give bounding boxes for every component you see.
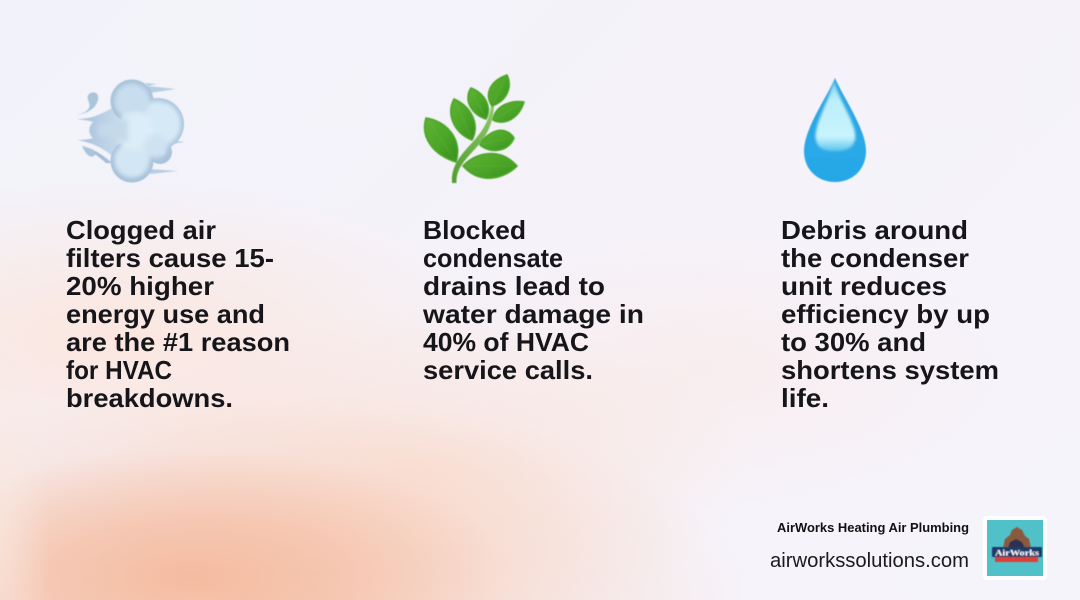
text block: clogged air filters: are the #1 reason (66, 327, 290, 357)
text block: debris around condenser (781, 215, 999, 413)
text block: debris around condenser: efficiency by up (781, 299, 990, 329)
icon: puff of air (77, 80, 184, 182)
website: airworkssolutions.com (770, 550, 969, 572)
text block: blocked condensate drains: service calls. (423, 355, 593, 385)
company name: AirWorks Heating Air Plumbing (777, 520, 969, 535)
text block: blocked condensate drains (422, 215, 644, 385)
text block: blocked condensate drains: water damage in (422, 299, 644, 329)
text block: clogged air filters: energy use and (66, 299, 265, 329)
text block: debris around condenser: Debris around (781, 215, 968, 245)
text block: clogged air filters: for HVAC (66, 355, 172, 385)
icon: water drop (804, 78, 866, 182)
text block: clogged air filters: breakdowns. (66, 383, 233, 413)
logo: AirWorks (995, 548, 1039, 558)
text block: blocked condensate drains: drains lead to (423, 271, 605, 301)
text block: debris around condenser: the condenser (781, 243, 969, 273)
text block: clogged air filters: filters cause 15- (66, 243, 274, 273)
icon: green herb sprig (425, 75, 524, 183)
text block: blocked condensate drains: Blocked (423, 215, 526, 245)
text block: clogged air filters: 20% higher (66, 271, 214, 301)
text block: blocked condensate drains: 40% of HVAC (423, 327, 589, 357)
text block: clogged air filters: Clogged air (66, 215, 216, 245)
text block: debris around condenser: life. (781, 383, 829, 413)
text block: clogged air filters (66, 215, 290, 413)
text block: debris around condenser: to 30% and (781, 327, 926, 357)
text block: blocked condensate drains: condensate (423, 243, 563, 273)
text block: debris around condenser: shortens system (781, 355, 999, 385)
text block: debris around condenser: unit reduces (781, 271, 947, 301)
logo (983, 516, 1047, 580)
